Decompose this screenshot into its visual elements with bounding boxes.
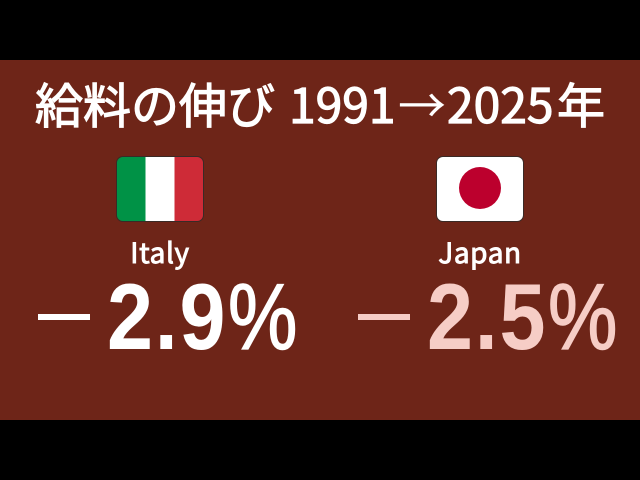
Japan label: Japan xyxy=(438,232,522,272)
title: 給料の伸び xyxy=(35,67,275,137)
icon: Japanese flag xyxy=(437,157,523,221)
panel: Italy xyxy=(38,156,297,369)
background panel xyxy=(0,60,640,420)
title: → xyxy=(398,67,446,137)
Japan value xyxy=(358,264,617,369)
Italy value xyxy=(38,264,297,369)
Italy label: Italy xyxy=(130,232,190,272)
Japan value: % xyxy=(548,264,617,369)
Italy value: 2.9 xyxy=(107,264,227,369)
title: 2025 xyxy=(447,67,554,137)
Japan value: 2.5 xyxy=(427,264,547,369)
title: 1991 xyxy=(289,67,396,137)
icon: Italian flag xyxy=(117,157,203,221)
title xyxy=(35,67,605,137)
panel: Japan xyxy=(358,156,617,369)
title: 年 xyxy=(557,67,605,137)
Italy value: % xyxy=(228,264,297,369)
